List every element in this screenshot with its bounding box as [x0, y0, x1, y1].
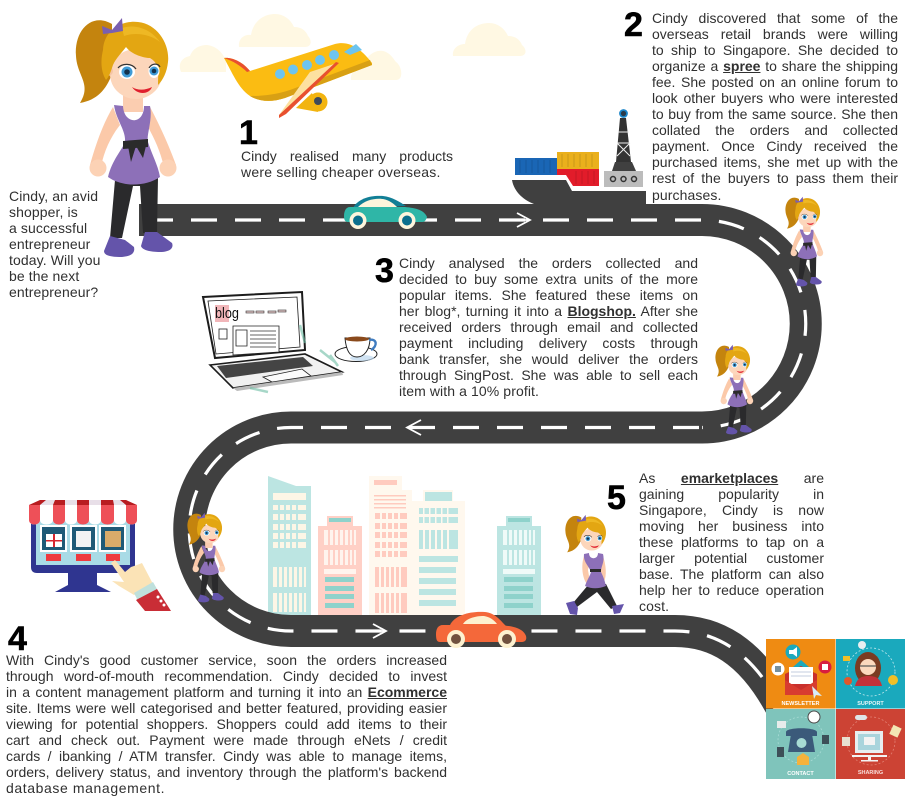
- step 4 text: through word-of-mouth recommendation. Cindy decided to invest: [6, 668, 447, 684]
- step 3 text: received orders through email and collected: [399, 319, 698, 335]
- step 5 text: cost.: [639, 598, 669, 614]
- step 3 text: bank transfer, she would deliver the orders: [399, 351, 698, 367]
- step 5 text: Singapore, Cindy is now: [639, 502, 824, 518]
- step 4 text: database management.: [6, 780, 165, 796]
- winding road: [139, 213, 806, 705]
- step 3 text: Cindy analysed the orders collected and: [399, 255, 698, 271]
- character: Cindy walking: [565, 515, 624, 615]
- step 5 text: gaining popularity in: [639, 486, 824, 502]
- step 1 text: Cindy realised many products: [241, 148, 453, 164]
- step 4 text: site. Items were well categorised and better featured, providing easier: [6, 700, 447, 716]
- step 5 text: larger potential customer: [639, 550, 824, 566]
- intro text: shopper, is: [9, 204, 78, 220]
- intro text: be the next: [9, 268, 79, 284]
- building: right teal tower: [497, 516, 541, 615]
- step 4 number: 4: [8, 620, 27, 658]
- character: large Cindy standing: [76, 18, 176, 257]
- tile: support: SUPPORT: [857, 701, 884, 707]
- step 3 text: her blog*, turning it into a Blogshop. After she: [399, 303, 698, 319]
- step 4 text: With Cindy's good customer service, soon the orders increased: [6, 652, 447, 668]
- step 3 text: payment including delivery costs through: [399, 335, 698, 351]
- step 3 number: 3: [375, 252, 394, 290]
- step 2 text: rest of the buyers to pass them their: [652, 170, 898, 186]
- icon: service tiles: [766, 639, 905, 779]
- label: NEWSLETTER: [782, 701, 819, 707]
- step 2 text: Cindy discovered that some of the: [652, 10, 898, 26]
- step 2 text: overseas retail brands were willing: [652, 26, 898, 42]
- character: Cindy on right curve: [715, 345, 753, 434]
- tile: sharing: SHARING: [858, 770, 883, 776]
- arrow: road direction right: [502, 213, 530, 227]
- step 2 number: 2: [624, 6, 643, 44]
- step 5 text: help her to reduce operation: [639, 582, 824, 598]
- step 3 text: decided to buy some extra units of the more: [399, 271, 698, 287]
- step 2 text: to buy from the same source. She then: [652, 106, 898, 122]
- step 5 text: these platforms to tap on a: [639, 534, 824, 550]
- icon: orange car: [436, 612, 526, 648]
- awning: [29, 500, 137, 524]
- intro text: [9, 188, 100, 300]
- step 4 text: viewing for potential shoppers. Shoppers could add items to their: [6, 716, 447, 732]
- step 1 text: [241, 148, 453, 180]
- step 5 text: [639, 470, 824, 614]
- building: cream towers: [369, 476, 465, 615]
- arrow: road direction right lower: [358, 624, 386, 638]
- step 4 text: orders, delivery status, and inventory through the platform's backend: [6, 764, 447, 780]
- intro text: a successful: [9, 220, 87, 236]
- step 2 text: to ship to Singapore. She decided to: [652, 42, 898, 58]
- step 3 text: through SingPost. She was able to sell each: [399, 367, 698, 383]
- step 5 number: 5: [607, 479, 626, 517]
- icon: yellow airplane: [224, 43, 372, 118]
- character: Cindy on left curve: [187, 513, 225, 602]
- city skyline: [268, 476, 541, 615]
- step 5 text: moving her business into: [639, 518, 824, 534]
- step 2 text: fee. She posted on an online forum to: [652, 74, 898, 90]
- clouds: [180, 14, 526, 80]
- step 1 number: 1: [239, 114, 258, 152]
- building: teal tower: [268, 476, 311, 615]
- step 4 text: cart and check out. Payment were made through eNets / credit: [6, 732, 447, 748]
- icon: teal car: [344, 196, 427, 229]
- icon: blog laptop with coffee: [203, 292, 377, 392]
- step 3 text: [399, 255, 698, 399]
- icon: container ship: [512, 110, 646, 205]
- step 5 text: base. The platform can also: [639, 566, 824, 582]
- step 3 text: popular items. She featured these items on: [399, 287, 698, 303]
- building: pink tower: [318, 516, 362, 615]
- step 2 text: purchases.: [652, 187, 721, 203]
- step 5 text: As emarketplaces are: [639, 470, 824, 486]
- step 2 text: organize a spree to share the shipping: [652, 58, 898, 74]
- intro text: entrepreneur: [9, 236, 90, 252]
- step 2 text: collated the orders and collected: [652, 122, 898, 138]
- arrow: road direction left: [407, 420, 435, 435]
- step 4 text: in a content management platform and turning it into an Ecommerce: [6, 684, 447, 700]
- blog wordmark: blog: [215, 306, 239, 322]
- step 2 text: look other buyers who were interested: [652, 90, 898, 106]
- step 4 text: cards / ibanking / ATM transfer. Cindy was able to manage items,: [6, 748, 447, 764]
- tile: contact: CONTACT: [787, 771, 814, 777]
- intro text: Cindy, an avid: [9, 188, 98, 204]
- step 2 text: [652, 10, 898, 203]
- step 2 text: payment. Once Cindy received the: [652, 138, 898, 154]
- step 4 text: [6, 652, 447, 796]
- icon: online store monitor: [29, 500, 171, 611]
- step 1 text: were selling cheaper overseas.: [241, 164, 441, 180]
- step 2 text: purchased items, she met up with the: [652, 154, 898, 170]
- intro text: today. Will you: [9, 252, 100, 268]
- step 3 text: item with a 10% profit.: [399, 383, 539, 399]
- character: Cindy on top curve: [785, 197, 823, 286]
- intro text: entrepreneur?: [9, 284, 98, 300]
